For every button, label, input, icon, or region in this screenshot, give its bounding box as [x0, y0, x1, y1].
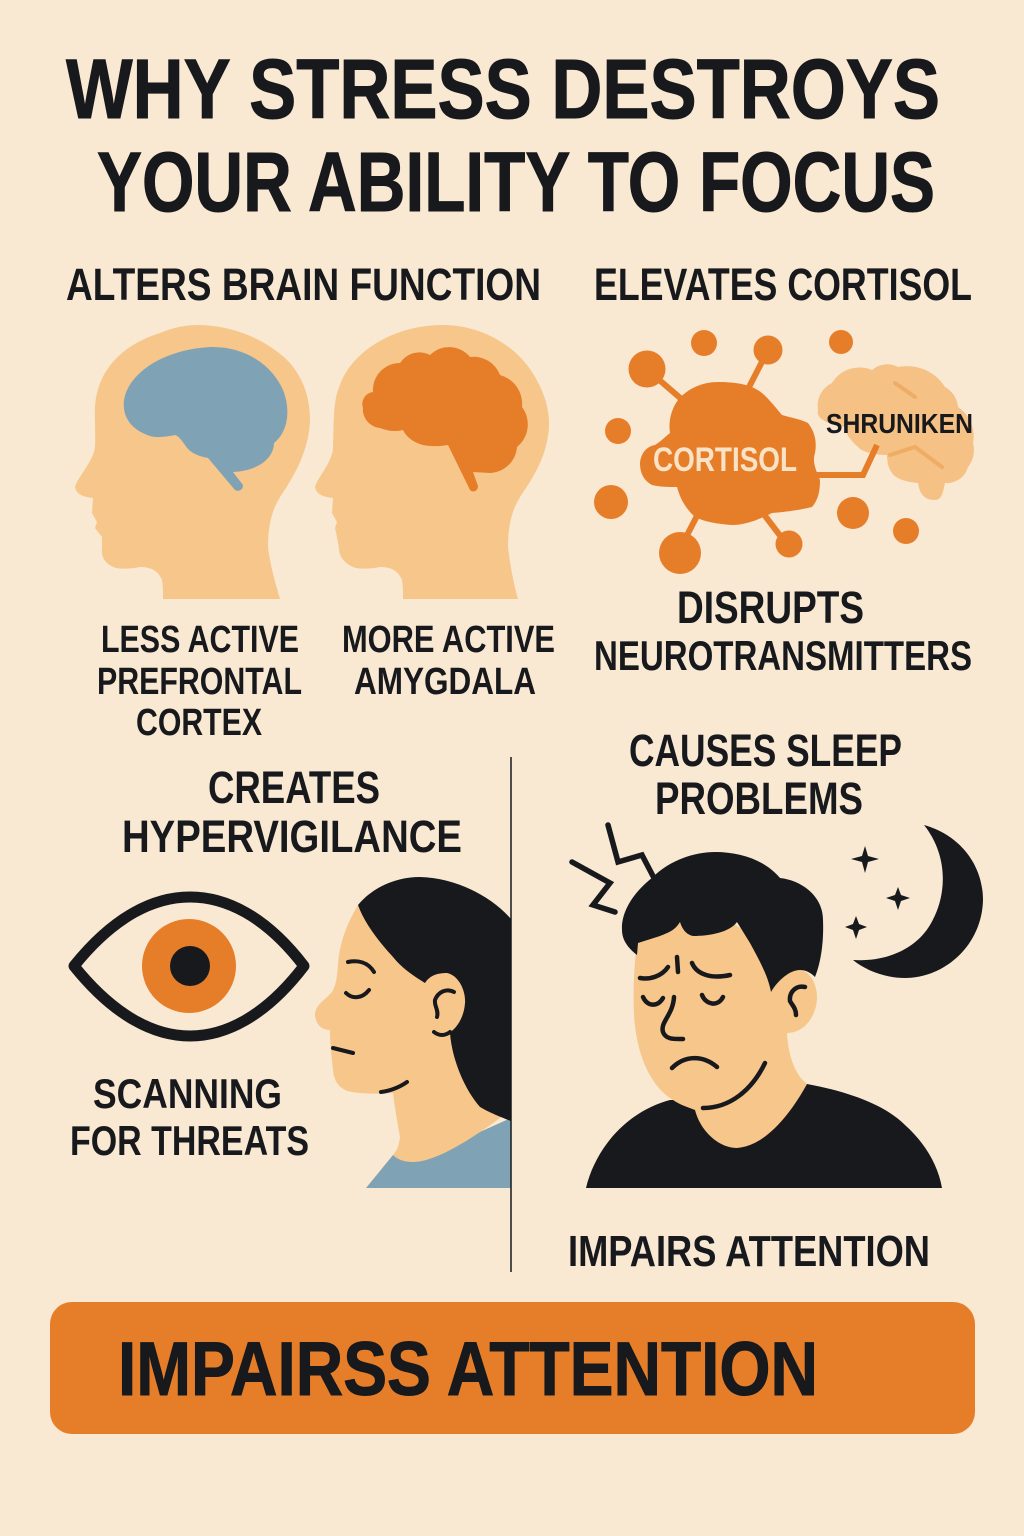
heading: creates hypervigilance: [122, 762, 462, 862]
divider: [510, 757, 512, 1272]
icon: crescent moon and stars: [845, 825, 983, 978]
heading: causes sleep problems: PROBLEMS: [655, 773, 863, 824]
label: more active amygdala: MORE ACTIVE: [342, 619, 555, 661]
label: less active prefrontal cortex: PREFRONTAL: [97, 661, 302, 703]
hair: [358, 877, 511, 1121]
icon: shrunken brain: [818, 364, 974, 500]
heading: causes sleep problems: CAUSES SLEEP: [629, 725, 902, 776]
label: scanning for threats: FOR THREATS: [70, 1117, 309, 1164]
shirt: [366, 1118, 511, 1188]
face, neck and ear: [634, 900, 817, 1148]
illustration: woman profile: [315, 877, 511, 1188]
label: cortisol: CORTISOL: [653, 441, 797, 479]
label: less active prefrontal cortex: LESS ACTIVE: [101, 619, 299, 661]
hair: [622, 852, 823, 992]
icon: right head with orange brain: [315, 325, 549, 599]
ear: [425, 973, 465, 1034]
icon: stress lightning bolts: [572, 825, 654, 912]
heading: disrupts neurotransmitters: [594, 582, 972, 679]
banner: impairss attention: [50, 1302, 975, 1434]
label: scanning for threats: SCANNING: [93, 1070, 282, 1117]
heading: creates hypervigilance: HYPERVIGILANCE: [122, 811, 462, 862]
illustration: tired man: [586, 852, 942, 1188]
icon: eye: [74, 897, 304, 1036]
blob: cortisol: [640, 382, 820, 525]
label: less active prefrontal cortex: CORTEX: [136, 702, 263, 744]
heading: alters brain function: ALTERS BRAIN FUNCTION: [66, 259, 541, 310]
shoulders: [586, 1084, 942, 1188]
icon: left head with blue brain: [75, 325, 310, 599]
label: more active amygdala: AMYGDALA: [354, 661, 536, 703]
diagram: cortisol molecule and shrunken brain: [594, 330, 974, 574]
label: more active amygdala: [342, 619, 555, 703]
label: impairs attention: IMPAIRS ATTENTION: [568, 1227, 930, 1276]
face and neck: [315, 905, 511, 1162]
title: [66, 42, 940, 229]
heading: creates hypervigilance: CREATES: [208, 762, 380, 813]
heading: causes sleep problems: [629, 725, 902, 824]
label: scanning for threats: [70, 1070, 309, 1164]
heading: disrupts neurotransmitters: DISRUPTS: [677, 582, 864, 633]
label: shrunken: SHRUNIKEN: [826, 408, 973, 439]
banner: impairss attention: IMPAIRSS ATTENTION: [118, 1327, 818, 1412]
label: less active prefrontal cortex: [97, 619, 302, 744]
